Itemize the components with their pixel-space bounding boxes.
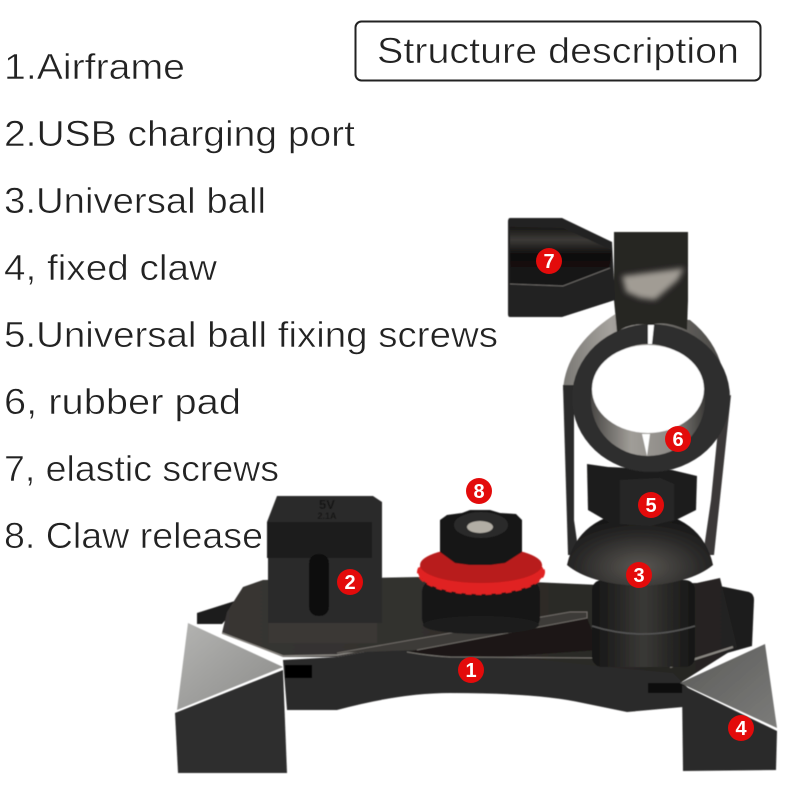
universal ball fixing screw [587, 464, 697, 526]
item 5: 5.Universal ball fixing screws [4, 314, 498, 355]
item 4: 4, fixed claw [4, 247, 218, 288]
universal ball [567, 510, 713, 667]
number badge 8 [466, 478, 492, 504]
number badge 2 [337, 569, 363, 595]
item 1: 1.Airframe [4, 46, 185, 87]
item 7: 7, elastic screws [4, 448, 279, 489]
number badge 8: 8 [473, 481, 485, 503]
number badge 4: 4 [735, 718, 747, 740]
item 6: 6, rubber pad [4, 381, 241, 422]
number badge 2: 2 [344, 572, 356, 594]
number badge 1 [458, 657, 484, 683]
USB charging port: 5V [319, 497, 335, 512]
airframe [222, 577, 737, 712]
USB charging port [267, 496, 382, 643]
number badge 7: 7 [543, 251, 555, 273]
clamp ring [572, 232, 730, 472]
arms [563, 313, 731, 555]
left fixed claw [175, 623, 287, 773]
elastic screw [508, 218, 615, 317]
title box [356, 22, 760, 80]
claw release knob [418, 510, 544, 634]
item 3: 3.Universal ball [4, 180, 266, 221]
number badge 3: 3 [633, 565, 645, 587]
number badge 6: 6 [672, 429, 684, 451]
number badge 6 [665, 426, 691, 452]
number badge 4 [728, 715, 754, 741]
right fixed claw [680, 644, 777, 771]
USB charging port: 2.1A [317, 511, 337, 521]
number badge 5 [638, 492, 664, 518]
product: phone holder [175, 218, 777, 773]
number badge 5: 5 [645, 495, 657, 517]
item 8: 8. Claw release [4, 515, 263, 556]
title box: Structure description [377, 30, 739, 71]
rear claws [197, 585, 754, 655]
item 2: 2.USB charging port [4, 113, 355, 154]
number badge 1: 1 [465, 660, 477, 682]
number badge 7 [536, 248, 562, 274]
feature list [4, 46, 498, 556]
number badge 3 [626, 562, 652, 588]
